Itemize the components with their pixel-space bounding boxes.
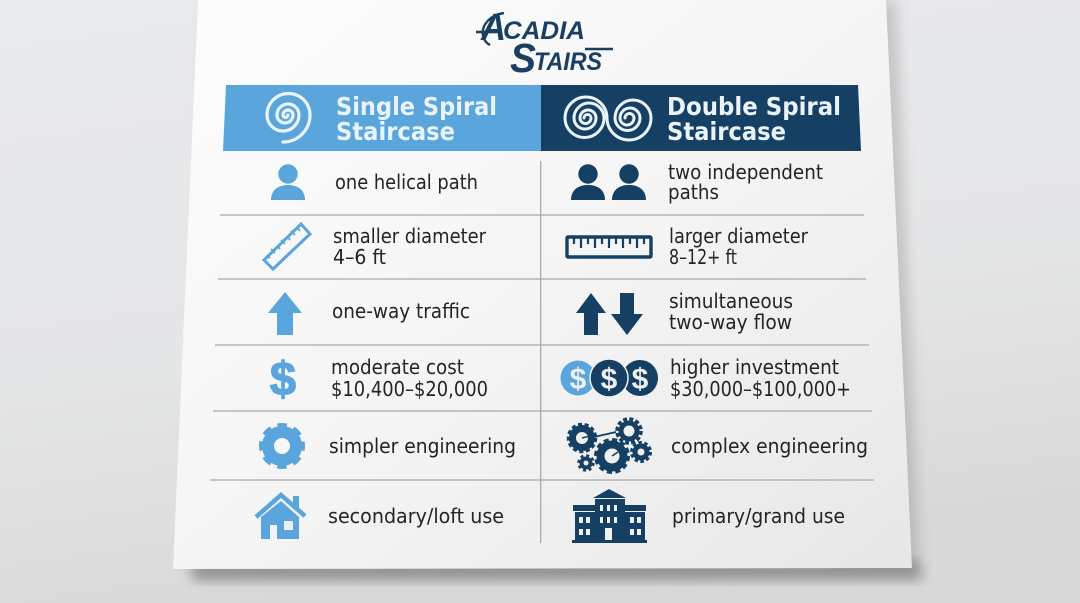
- text: one helical path: one helical path: [335, 170, 478, 194]
- text: smaller diameter: [333, 224, 487, 269]
- icon: up arrow: [268, 292, 302, 335]
- icon: house: [256, 495, 305, 539]
- text: simultaneous two-way flow: two-way flow: [669, 310, 792, 334]
- text: larger diameter: [669, 224, 809, 269]
- row: cost: [270, 352, 851, 405]
- text: simultaneous two-way flow: [669, 289, 793, 334]
- text: moderate cost: [331, 355, 488, 401]
- icon: single spiral: [267, 94, 310, 142]
- icon: three coins: [560, 359, 658, 397]
- logo: Acadia Stairs: A: [480, 7, 506, 49]
- text: primary/grand use: primary/grand use: [672, 504, 845, 528]
- logo: Acadia Stairs: S: [510, 35, 536, 81]
- logo: Acadia Stairs: TAIRS: [534, 48, 602, 76]
- text: higher investment: [670, 355, 851, 401]
- heading: double spiral staircase: Staircase: [667, 117, 786, 146]
- row: diameter: [264, 224, 809, 269]
- text: one-way traffic: one-way traffic: [332, 299, 470, 323]
- heading: single spiral staircase: Single Spiral: [336, 92, 497, 121]
- icon: double spiral: [565, 97, 651, 140]
- header: single spiral: [223, 85, 541, 151]
- icon: two people: [571, 164, 646, 200]
- heading: single spiral staircase: Staircase: [336, 117, 455, 146]
- row: paths: [271, 160, 823, 204]
- icon: large building: [572, 489, 647, 543]
- icon: up and down arrows: [576, 293, 643, 335]
- text: larger diameter: 8–12+ ft: [669, 245, 737, 269]
- text: smaller diameter: smaller diameter: [333, 224, 487, 248]
- text: higher investment: $30,000–$100,000+: [670, 377, 851, 401]
- text: two independent paths: paths: [668, 180, 719, 204]
- text: moderate cost: moderate cost: [331, 355, 464, 379]
- text: smaller diameter: 4–6 ft: [333, 245, 386, 269]
- heading: double spiral staircase: Double Spiral: [667, 92, 841, 121]
- logo: Acadia Stairs: [476, 7, 613, 81]
- text: simpler engineering: simpler engineering: [329, 434, 516, 458]
- text: larger diameter: larger diameter: [669, 224, 809, 248]
- text: moderate cost: $10,400–$20,000: [331, 377, 488, 401]
- heading: double spiral staircase: [667, 92, 841, 146]
- icon: dollar sign: $: [270, 352, 296, 405]
- icon: horizontal ruler: [567, 237, 651, 257]
- text: complex engineering: complex engineering: [671, 434, 868, 458]
- icon: angled ruler: [264, 224, 310, 269]
- comparison table: [210, 85, 874, 543]
- text: two independent paths: [668, 160, 823, 204]
- icon: gear cluster: [568, 419, 650, 472]
- text: secondary/loft use: secondary/loft use: [328, 504, 504, 528]
- icon: three coins: $: [632, 363, 649, 396]
- row: use: [256, 489, 845, 543]
- logo: Acadia Stairs: CADIA: [503, 17, 585, 45]
- heading: single spiral staircase: [336, 92, 497, 146]
- row: engineering: [262, 419, 868, 472]
- text: two independent paths: two independent: [668, 160, 823, 184]
- text: higher investment: higher investment: [670, 355, 839, 379]
- icon: single gear: [262, 426, 302, 466]
- text: simultaneous two-way flow: simultaneous: [669, 289, 793, 313]
- paper sheet: [173, 0, 912, 569]
- icon: three coins: $: [570, 363, 587, 396]
- icon: one person: [271, 164, 305, 200]
- header: double spiral: [541, 85, 861, 151]
- paper shadow: [190, 0, 924, 580]
- icon: three coins: $: [601, 363, 618, 396]
- row: traffic: [268, 289, 793, 335]
